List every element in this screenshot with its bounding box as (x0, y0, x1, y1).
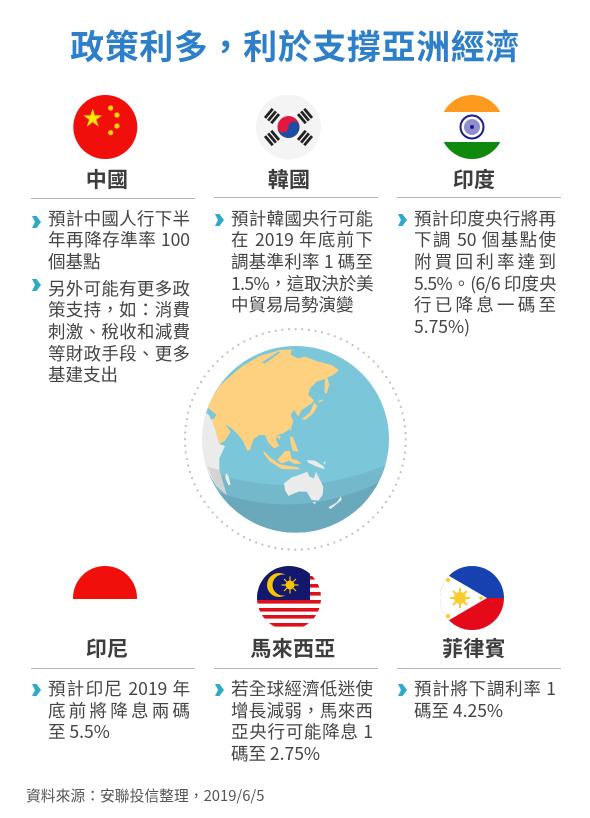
flag: China (73, 95, 138, 159)
bullet (398, 684, 407, 696)
text: India (398, 206, 556, 339)
text: Philippines: 碼至 4.25% (414, 698, 503, 723)
land: Africa (200, 413, 227, 495)
text: India: 下調 50 個基點使 (414, 227, 556, 252)
text: Malaysia: 碼至 2.75% (231, 741, 320, 766)
text: Indonesia: 預計印尼 2019 年 (48, 676, 190, 701)
bullet (215, 214, 224, 226)
text: China: 基建支出 (48, 362, 118, 387)
text: China: 個基點 (48, 249, 100, 274)
land: Japan and Sakhalin (302, 377, 329, 420)
title: 政策利多，利於支撐亞洲經濟 (70, 20, 520, 69)
text: China: 預計中國人行下半 (48, 206, 190, 230)
label: South Korea: 韓國 (268, 164, 310, 194)
label: China: 中國 (86, 164, 128, 194)
text: Indonesia (32, 676, 190, 744)
text: Indonesia: 至 5.5% (48, 719, 110, 744)
land: New Zealand (313, 496, 342, 509)
flag: Philippines (440, 566, 504, 630)
text: South Korea (215, 206, 373, 317)
label: Philippines: 菲律賓 (442, 633, 506, 663)
bullet (32, 684, 41, 696)
label: Indonesia: 印尼 (86, 633, 128, 663)
text: South Korea: 調基準利率 1 碼至 (231, 249, 373, 274)
text: China (32, 206, 190, 387)
text: China: 刺激、稅收和減費 (48, 319, 190, 344)
text: Malaysia (215, 676, 373, 766)
text: India: 5.75%) (414, 314, 470, 339)
bullet (32, 216, 41, 228)
text: Philippines (398, 676, 556, 723)
label: Malaysia: 馬來西亞 (250, 633, 336, 663)
text: India: 5.5%。(6/6 印度央 (414, 271, 556, 296)
land: Asia (208, 349, 339, 451)
text: Malaysia: 若全球經濟低迷使 (231, 676, 373, 701)
land: Australia (284, 472, 323, 501)
dotted ring (185, 329, 406, 550)
bullet (32, 279, 41, 291)
text: Malaysia: 增長減弱，馬來西 (231, 698, 373, 723)
text: China: 策支持，如：消費 (48, 297, 190, 322)
text: Malaysia: 亞央行可能降息 1 (231, 719, 373, 744)
land: Southeast Asia (263, 428, 302, 469)
globe (184, 328, 407, 551)
text: South Korea: 預計韓國央行可能 (231, 206, 373, 230)
text: India: 附買回利率達到 (414, 249, 556, 274)
text: China: 等財政手段、更多 (48, 341, 190, 366)
text: India: 行已降息一碼至 (414, 292, 556, 317)
bullet (398, 214, 407, 226)
flag: Malaysia (257, 566, 321, 627)
bullet (215, 684, 224, 696)
text: China: 另外可能有更多政 (48, 276, 190, 301)
text: South Korea: 中貿易局勢演變 (231, 292, 354, 317)
flag: India (444, 95, 500, 159)
flag: South Korea (256, 95, 321, 160)
text: Philippines: 預計將下調利率 1 (414, 676, 556, 701)
text: India: 預計印度央行將再 (414, 206, 556, 230)
text: China: 年再降存準率 100 (48, 227, 190, 252)
text: South Korea: 在 2019 年底前下 (231, 227, 373, 252)
source note: 資料來源：安聯投信整理，2019/6/5 (26, 785, 264, 806)
text: South Korea: 1.5%，這取決於美 (231, 271, 373, 296)
land: New Guinea (307, 460, 326, 469)
label: India: 印度 (453, 164, 495, 194)
text: Indonesia: 底前將降息兩碼 (48, 698, 190, 723)
flag: Indonesia (73, 566, 137, 599)
